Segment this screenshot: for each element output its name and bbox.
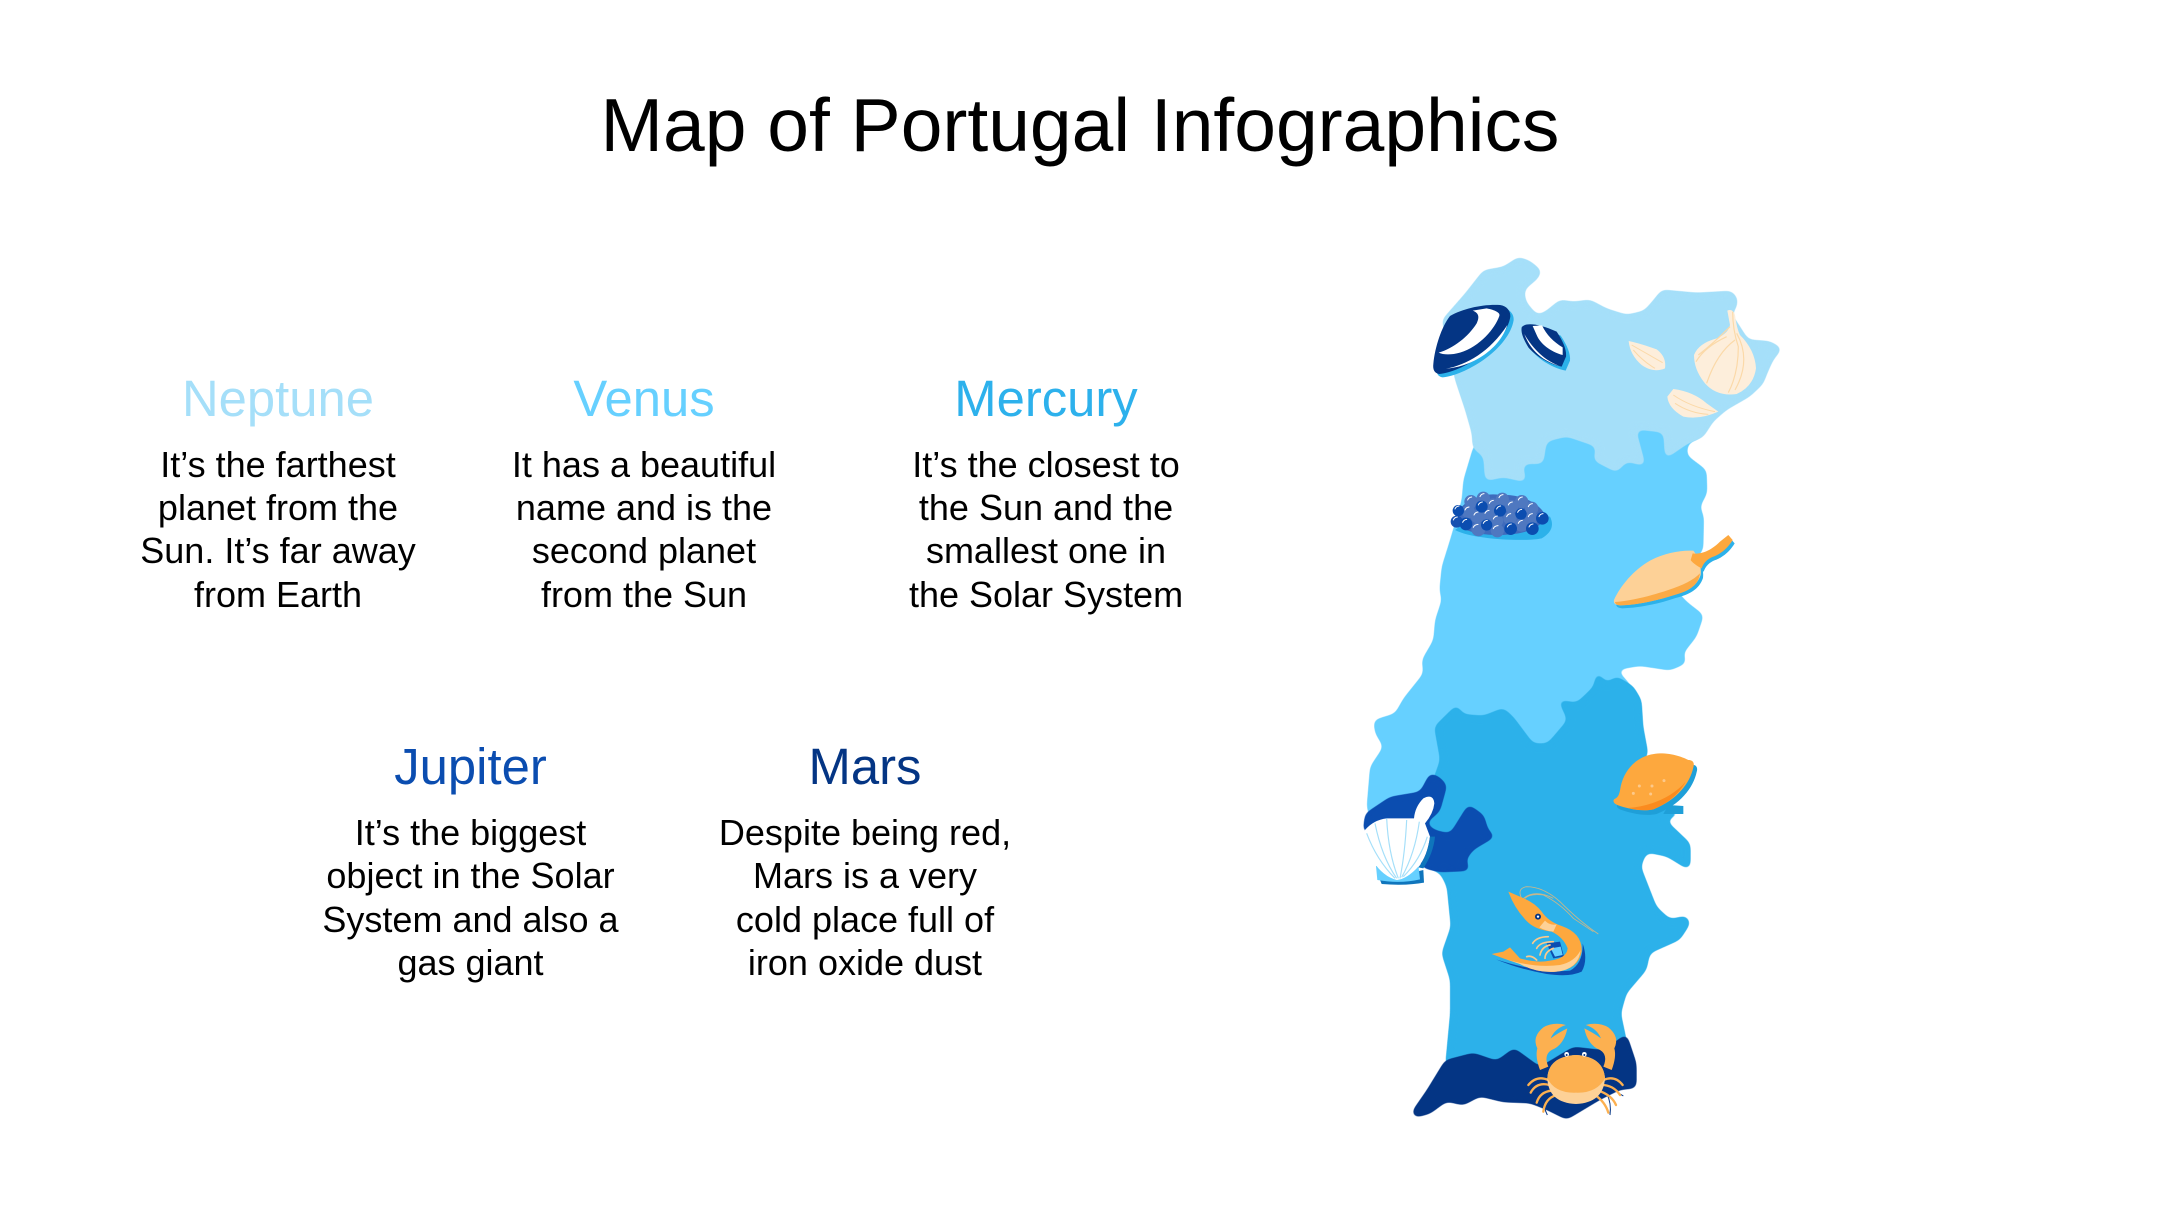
icon: scallop shell <box>1365 797 1435 885</box>
text: Neptune description <box>140 444 416 615</box>
text: Neptune description: Sun. It’s far away <box>140 530 416 571</box>
text: Mercury description: the Solar System <box>909 574 1183 615</box>
text: Mars description: cold place full of <box>736 899 994 940</box>
text: Jupiter description: object in the Solar <box>326 855 615 896</box>
icon: razor shell <box>1614 535 1735 608</box>
text: Jupiter description: gas giant <box>397 942 544 983</box>
heading: Mercury: Mercury <box>954 370 1138 426</box>
icon: caviar <box>1451 492 1552 540</box>
icon: large clam <box>1433 305 1514 377</box>
text: Mercury description: the Sun and the <box>919 487 1173 528</box>
text: Jupiter description: System and also a <box>322 899 619 940</box>
panel: Mercury <box>909 370 1183 615</box>
title: Map of Portugal Infographics <box>601 83 1559 167</box>
panel: Neptune <box>140 370 416 615</box>
region: south-centre (Mercury colour) <box>1423 671 1691 1067</box>
panel: Jupiter <box>322 738 619 983</box>
text: Mars description <box>719 812 1011 983</box>
region: Lisbon area (Jupiter colour) <box>1363 773 1496 872</box>
text: Venus description: second planet <box>532 530 756 571</box>
heading: Jupiter: Jupiter <box>394 738 547 795</box>
icon: shrimp <box>1492 887 1598 975</box>
text: Mercury description: It’s the closest to <box>912 444 1180 484</box>
text: Neptune description: from Earth <box>194 574 362 615</box>
text: Mercury description: smallest one in <box>926 530 1166 571</box>
text: Venus description <box>512 444 776 615</box>
text: Jupiter description <box>322 812 619 983</box>
icon: small clam <box>1521 324 1570 371</box>
text: Venus description: name and is the <box>516 487 772 528</box>
heading: Mars: Mars <box>809 738 921 795</box>
heading: Venus: Venus <box>573 370 715 426</box>
text: Mars description: Mars is a very <box>753 855 977 896</box>
icon: crab <box>1528 1024 1623 1115</box>
region: Algarve (Mars colour) <box>1412 1033 1637 1120</box>
region: centre (Venus colour) <box>1367 407 1707 840</box>
icon: lemon <box>1614 753 1697 815</box>
region: north (Neptune colour) <box>1442 257 1783 483</box>
heading: Neptune: Neptune <box>182 370 374 426</box>
panel: Venus <box>512 370 776 615</box>
text: Neptune description: It’s the farthest <box>160 444 396 484</box>
text: Mars description: iron oxide dust <box>748 942 982 983</box>
text: Mars description: Despite being red, <box>719 812 1011 853</box>
text: Venus description: It has a beautiful <box>512 444 776 484</box>
text: Mercury description <box>909 444 1183 615</box>
text: Neptune description: planet from the <box>158 487 398 528</box>
text: Jupiter description: It’s the biggest <box>355 812 586 853</box>
panel: Mars <box>719 738 1011 983</box>
icon: garlic <box>1629 310 1756 418</box>
text: Venus description: from the Sun <box>541 574 747 615</box>
